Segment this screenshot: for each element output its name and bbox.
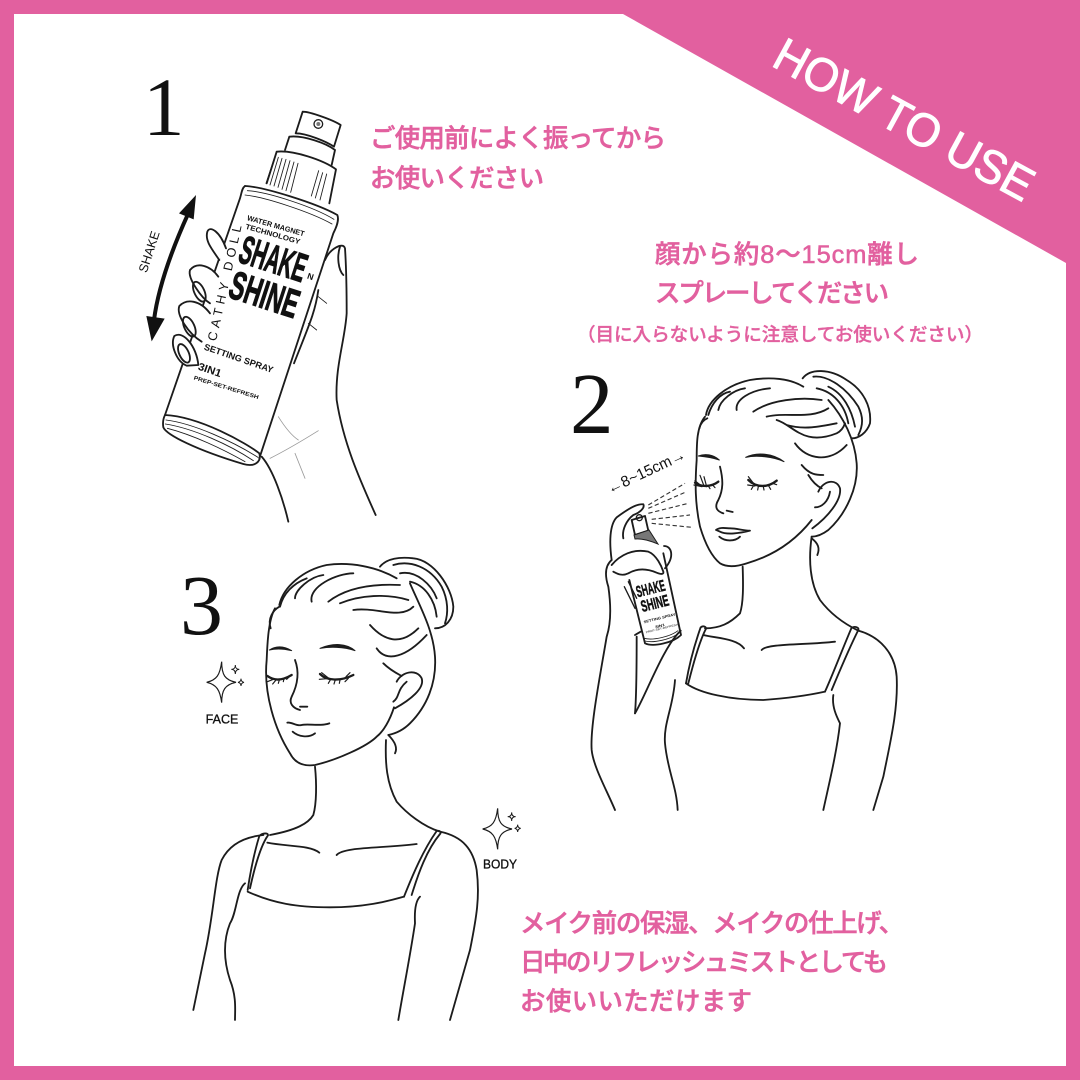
head and hair (696, 371, 870, 566)
bottle label text: 3IN1 (196, 361, 223, 380)
neck, shoulders and top (635, 537, 897, 810)
title: HOW TO USE: HOW TO USE (765, 27, 1044, 211)
face features (266, 645, 355, 736)
distance label 8~15cm: ←8~15cm→ (605, 446, 688, 498)
hand holding bottle and arm (591, 504, 671, 810)
small bottle (624, 515, 681, 645)
label: BODY: BODY (483, 856, 517, 871)
ear (812, 482, 840, 555)
illustration: hand shaking bottle (136, 112, 376, 522)
step 3 note text: お使いいただけます (520, 988, 752, 1016)
spray mist (648, 483, 692, 527)
sparkle: body (483, 808, 521, 849)
bottle label text: WATER MAGNET (246, 213, 306, 238)
step 2 instruction text: スプレーしてください (655, 280, 889, 308)
sparkle: face (207, 662, 244, 703)
spray bottle (163, 112, 341, 465)
small bottle: PREP-SET-REFRESH (645, 622, 679, 634)
step 1 instruction text (370, 125, 666, 193)
bottle label text (193, 213, 315, 401)
step 2 instruction text: 顔から約8〜15cm離し (655, 241, 919, 269)
head and hair (266, 558, 453, 765)
small bottle: 3IN1 (655, 623, 665, 629)
step 1 instruction text: ご使用前によく振ってから (370, 125, 666, 153)
arrow: shake direction (146, 195, 196, 341)
small bottle: SHAKE (635, 578, 667, 601)
bottle label text: N (306, 271, 315, 282)
illustration: woman spraying (591, 371, 897, 810)
step 3 note text: 日中のリフレッシュミストとしても (520, 949, 888, 977)
face features (694, 454, 784, 540)
step number 3: 3 (180, 557, 223, 653)
ear (388, 672, 422, 753)
step 2 instruction text (577, 241, 983, 345)
bottle label text: SHINE (224, 263, 305, 327)
bottle label text: CATHY DOLL (205, 224, 245, 342)
step 1 instruction text: お使いください (370, 165, 544, 193)
neck, shoulders and top (193, 740, 478, 1020)
bottle label text: PREP-SET-REFRESH (193, 376, 259, 401)
hand outline (262, 246, 376, 522)
illustration: woman with sparkles (193, 558, 521, 1020)
label: SHAKE: SHAKE (136, 229, 163, 274)
step 2 instruction text: （目に入らないように注意してお使いください） (577, 324, 983, 345)
fingers (173, 229, 226, 366)
small bottle: SETTING SPRAY (643, 612, 677, 624)
small bottle: SHINE (639, 592, 671, 616)
label: FACE: FACE (206, 712, 238, 727)
step number 2: 2 (570, 355, 614, 452)
step number 1: 1 (143, 61, 184, 153)
bottle label text: SETTING SPRAY (203, 342, 275, 375)
bottle label text: TECHNOLOGY (244, 222, 302, 246)
step 3 note text: メイク前の保湿、メイクの仕上げ、 (520, 910, 904, 938)
bottle label text: SHAKE (234, 228, 312, 291)
step 3 note text (520, 910, 904, 1016)
